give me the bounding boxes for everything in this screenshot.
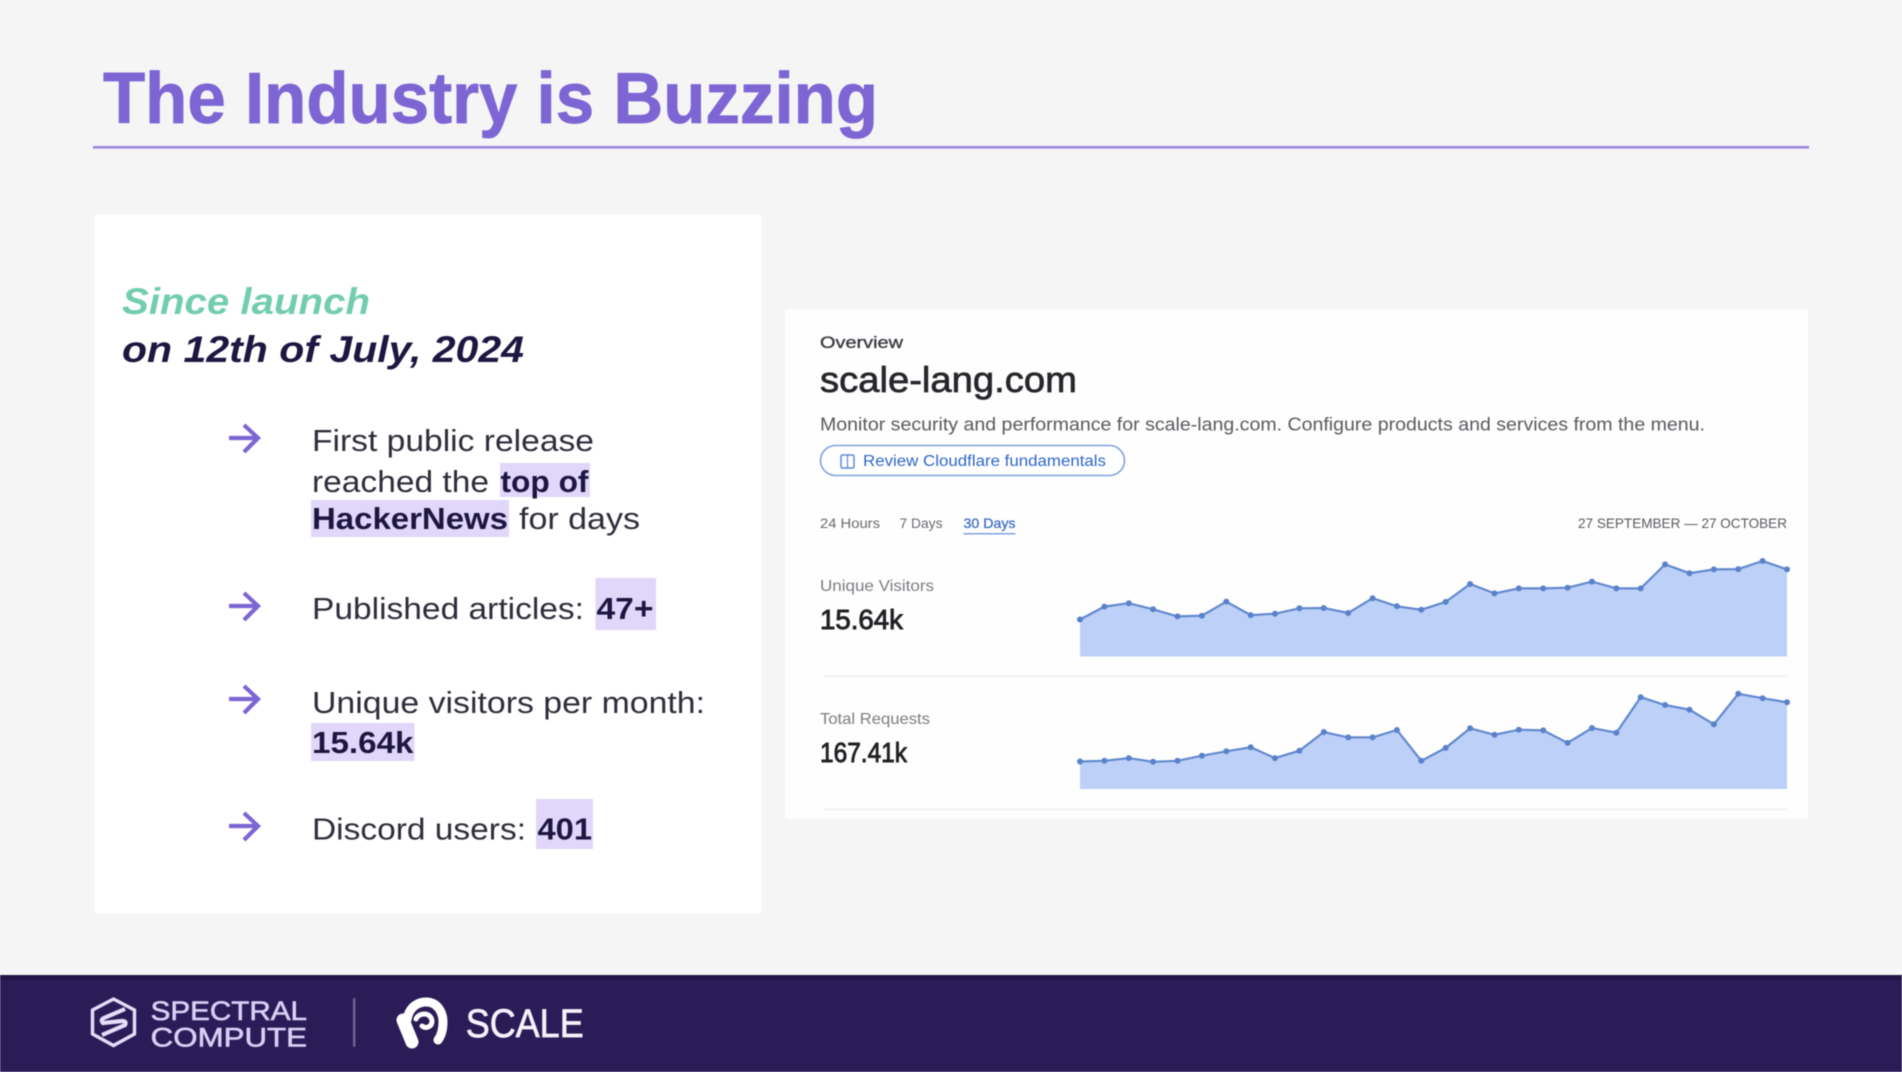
footer bar bbox=[0, 975, 1902, 1072]
button: review fundamentals: Review Cloudflare fundamentals bbox=[863, 453, 1106, 470]
stat: published articles: 47+ bbox=[596, 591, 654, 626]
chart: unique visitors area bbox=[1077, 558, 1790, 656]
stat: discord users bbox=[229, 799, 593, 849]
stat: published articles bbox=[229, 578, 656, 630]
button: review fundamentals bbox=[820, 446, 1124, 476]
tabs: time ranges: 24 Hours bbox=[820, 515, 880, 531]
logo: scale bbox=[403, 1002, 584, 1046]
stat: discord users: Discord users: bbox=[312, 812, 526, 846]
panel: analytics screenshot bbox=[785, 309, 1808, 819]
logo: spectral compute bbox=[92, 996, 307, 1052]
stat: HackerNews: top of bbox=[500, 464, 589, 499]
logo: spectral compute: COMPUTE bbox=[151, 1022, 307, 1052]
stat: HackerNews: reached the bbox=[312, 464, 489, 499]
chart: total requests area bbox=[1077, 691, 1790, 789]
tabs: time ranges bbox=[820, 515, 1016, 534]
metric: total requests: 167.41k bbox=[820, 737, 908, 768]
metric: unique visitors bbox=[820, 578, 934, 635]
heading: since launch: on 12th of July, 2024 bbox=[122, 329, 524, 370]
icon: arrow bbox=[229, 813, 258, 840]
icon: spectral hexagon bbox=[92, 999, 134, 1046]
metric: unique visitors: Unique Visitors bbox=[820, 578, 934, 595]
icon: arrow bbox=[229, 686, 258, 713]
icon: arrow bbox=[229, 593, 258, 620]
text: date range: 27 SEPTEMBER — 27 OCTOBER bbox=[1578, 515, 1787, 531]
tabs: time ranges: 30 Days bbox=[964, 515, 1016, 531]
text: description: Monitor security and performance for scale-lang.com. Configure products and services from the menu. bbox=[820, 414, 1705, 434]
title: The Industry is Buzzing bbox=[103, 59, 878, 139]
metric: unique visitors: 15.64k bbox=[820, 604, 904, 635]
logo: spectral compute: SPECTRAL bbox=[151, 996, 307, 1026]
metric: total requests bbox=[820, 711, 930, 768]
stat: HackerNews: First public release bbox=[312, 423, 594, 458]
stat: unique visitors: Unique visitors per month: bbox=[312, 685, 705, 720]
stat: published articles: Published articles: bbox=[312, 591, 584, 626]
metric: total requests: Total Requests bbox=[820, 711, 930, 728]
stat: HackerNews: for days bbox=[519, 501, 640, 536]
logo: scale: SCALE bbox=[466, 1002, 584, 1046]
stat: unique visitors: 15.64k bbox=[312, 725, 414, 760]
tabs: time ranges: 7 Days bbox=[900, 515, 942, 531]
heading: since launch bbox=[122, 281, 524, 370]
icon: scale arch bbox=[403, 1002, 443, 1042]
stat: discord users: 401 bbox=[538, 812, 592, 846]
stat: unique visitors bbox=[229, 685, 705, 761]
text: overview label: Overview bbox=[820, 333, 904, 352]
panel: launch statistics bbox=[95, 215, 761, 913]
stat: HackerNews: HackerNews bbox=[312, 501, 508, 536]
heading: domain: scale-lang.com bbox=[820, 359, 1077, 400]
stat: HackerNews bbox=[229, 423, 640, 537]
heading: since launch: Since launch bbox=[122, 281, 370, 322]
icon: arrow bbox=[229, 425, 258, 452]
